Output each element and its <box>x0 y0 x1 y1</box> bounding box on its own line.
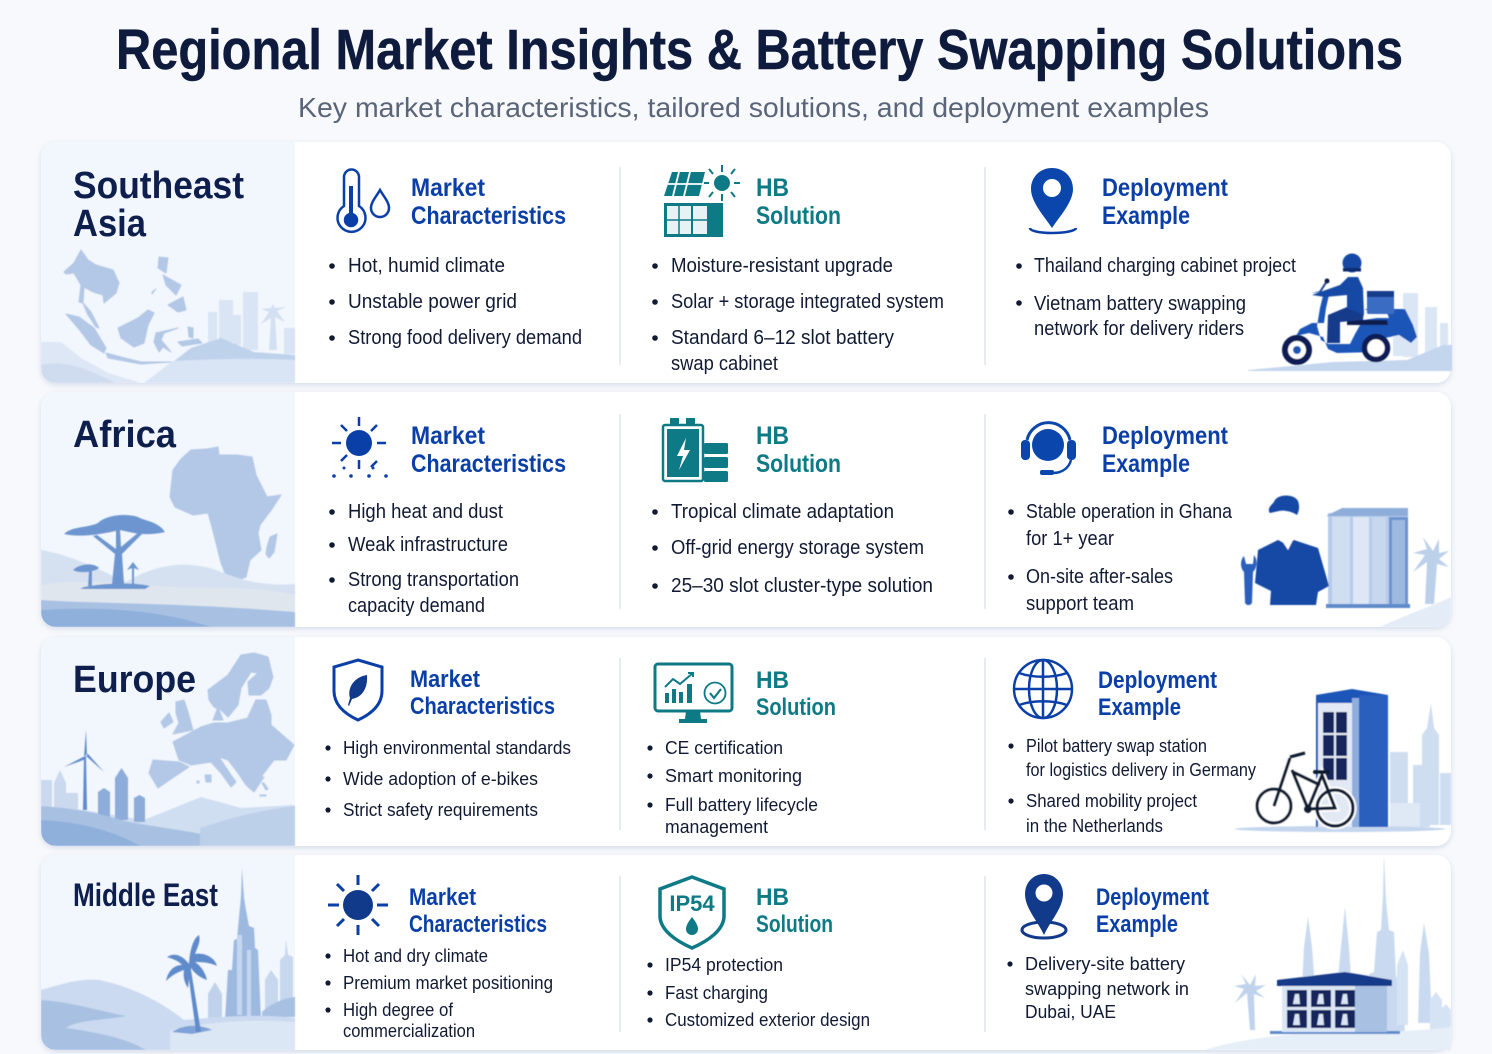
list: HB solution <box>647 955 870 1030</box>
icon: globe <box>1014 660 1072 718</box>
list: deployment example <box>1007 954 1189 1022</box>
list: deployment example: for 1+ year <box>1026 528 1114 550</box>
heading: market characteristics <box>410 666 555 720</box>
list: deployment example: Vietnam battery swapping <box>1034 293 1246 315</box>
illustration: bicycle at swap cabinet with city <box>1235 689 1451 832</box>
heading: deployment example: Example <box>1096 911 1178 938</box>
list: market characteristics: Hot, humid climate <box>348 255 505 277</box>
illustration: swap station with Dubai skyline <box>1205 855 1451 1050</box>
icon: battery with lightning and storage stack <box>663 418 728 482</box>
list: HB solution <box>652 255 944 375</box>
list: market characteristics: Unstable power grid <box>348 291 517 313</box>
heading: market characteristics: Market <box>411 174 486 202</box>
heading: deployment example <box>1098 667 1217 721</box>
list: HB solution: Standard 6–12 slot battery <box>671 327 894 349</box>
list: market characteristics: Weak infrastructure <box>348 534 508 556</box>
icon: sun <box>328 875 388 935</box>
list: HB solution: Tropical climate adaptation <box>671 501 894 523</box>
heading: HB solution: HB <box>756 174 789 202</box>
heading: deployment example <box>1102 422 1229 478</box>
icon: support headset <box>1021 423 1076 475</box>
heading: HB solution: HB <box>756 422 789 450</box>
region illustration: Africa map, acacia tree and hills <box>41 392 295 627</box>
region name: Middle East <box>73 877 218 913</box>
list: deployment example: swapping network in <box>1025 979 1189 999</box>
list: deployment example: for logistics delivery in Germany <box>1026 760 1256 780</box>
list: deployment example <box>1008 501 1233 615</box>
list: HB solution: Moisture-resistant upgrade <box>671 255 893 277</box>
heading: market characteristics: Characteristics <box>409 911 547 938</box>
illustration: technician, cabinet and palm <box>1241 495 1451 627</box>
heading: HB solution: Solution <box>756 202 841 230</box>
list: deployment example: network for delivery riders <box>1034 318 1244 340</box>
list: deployment example: Shared mobility project <box>1026 791 1197 811</box>
panel: Africa <box>41 392 1451 627</box>
list: HB solution: IP54 protection <box>665 955 783 975</box>
region name <box>73 165 244 245</box>
subtitle: Key market characteristics, tailored solutions, and deployment examples <box>298 92 1209 123</box>
list: deployment example <box>1016 255 1296 340</box>
region illustration: Southeast Asia map and skyline <box>41 142 295 383</box>
heading: deployment example: Deployment <box>1102 174 1229 202</box>
heading: deployment example <box>1102 174 1229 230</box>
list: HB solution: Customized exterior design <box>665 1010 870 1030</box>
panel: Southeast Asia <box>41 142 1452 383</box>
heading: HB solution: Solution <box>756 450 841 478</box>
heading: market characteristics: Market <box>411 422 486 450</box>
list: HB solution: swap cabinet <box>671 353 778 375</box>
list: market characteristics: Premium market positioning <box>343 973 553 993</box>
list: market characteristics <box>329 501 519 617</box>
icon: sun with dust <box>332 417 388 478</box>
illustration: delivery rider on scooter <box>1248 254 1452 371</box>
list: HB solution: Solar + storage integrated system <box>671 291 944 313</box>
heading: deployment example <box>1096 884 1209 938</box>
heading: deployment example: Example <box>1102 450 1190 478</box>
region name: Africa <box>73 414 177 456</box>
list: HB solution <box>647 738 818 837</box>
icon: monitor with chart and check <box>655 664 732 723</box>
list: market characteristics <box>325 738 571 820</box>
list: market characteristics: commercialization <box>343 1021 475 1041</box>
list: market characteristics <box>325 946 553 1041</box>
list: HB solution <box>652 501 933 597</box>
heading: HB solution: HB <box>756 884 789 911</box>
heading: deployment example: Deployment <box>1102 422 1229 450</box>
list: market characteristics <box>329 255 582 349</box>
heading: HB solution: Solution <box>756 911 833 938</box>
panel: Middle East <box>41 855 1451 1050</box>
list: deployment example: Thailand charging cabinet project <box>1034 255 1296 277</box>
heading: HB solution <box>756 884 833 938</box>
list: deployment example: Stable operation in Ghana <box>1026 501 1233 523</box>
heading: market characteristics <box>409 884 547 938</box>
icon: location pin <box>1030 168 1076 233</box>
icon: thermometer and droplet <box>338 170 389 232</box>
heading: market characteristics: Characteristics <box>411 202 566 230</box>
icon: solar panel and cabinet <box>664 165 740 237</box>
list: HB solution: CE certification <box>665 738 783 758</box>
region name: Southeast <box>73 165 244 207</box>
heading: market characteristics: Characteristics <box>410 693 555 720</box>
heading: HB solution <box>756 174 841 230</box>
heading: deployment example: Deployment <box>1096 884 1209 911</box>
list: market characteristics: Wide adoption of e-bikes <box>343 769 538 789</box>
icon: dark location pin <box>1022 874 1066 938</box>
list: market characteristics: Strong transportation <box>348 569 519 591</box>
list: market characteristics: capacity demand <box>348 595 485 617</box>
list: market characteristics: Hot and dry climate <box>343 946 488 966</box>
list: market characteristics: High heat and dust <box>348 501 503 523</box>
panel: Europe <box>41 637 1451 846</box>
heading: HB solution <box>756 422 841 478</box>
icon: IP54 shield <box>660 877 724 948</box>
list: deployment example: Pilot battery swap station <box>1026 736 1207 756</box>
list: deployment example: support team <box>1026 593 1134 615</box>
list: deployment example <box>1008 736 1256 836</box>
heading: market characteristics: Characteristics <box>411 450 566 478</box>
icon: shield with leaf <box>334 660 382 720</box>
region illustration: Burj tower, palm and dunes <box>41 855 295 1050</box>
list: deployment example: Delivery-site battery <box>1025 954 1185 974</box>
list: market characteristics: High degree of <box>343 1000 454 1020</box>
heading: deployment example: Deployment <box>1098 667 1217 694</box>
list: HB solution: Off-grid energy storage system <box>671 537 924 559</box>
region name: Europe <box>73 659 196 701</box>
heading: market characteristics <box>411 174 566 230</box>
region illustration: Europe map, wind turbine and town <box>41 637 295 846</box>
heading: market characteristics: Market <box>410 666 480 693</box>
list: deployment example: On-site after-sales <box>1026 566 1173 588</box>
list: HB solution: 25–30 slot cluster-type solution <box>671 575 933 597</box>
heading: market characteristics: Market <box>409 884 476 911</box>
heading: market characteristics <box>411 422 566 478</box>
list: HB solution: Smart monitoring <box>665 766 802 786</box>
heading: deployment example: Example <box>1102 202 1190 230</box>
list: HB solution: management <box>665 817 768 837</box>
list: HB solution: Fast charging <box>665 983 768 1003</box>
heading: HB solution: HB <box>756 667 789 694</box>
list: HB solution: Full battery lifecycle <box>665 795 818 815</box>
list: market characteristics: Strong food delivery demand <box>348 327 582 349</box>
list: deployment example: Dubai, UAE <box>1025 1002 1116 1022</box>
list: deployment example: in the Netherlands <box>1026 816 1163 836</box>
heading: deployment example: Example <box>1098 694 1181 721</box>
icon: IP54 shield: IP54 <box>669 891 715 916</box>
heading: HB solution: Solution <box>756 694 836 721</box>
region name: Asia <box>73 203 147 245</box>
list: market characteristics: High environmental standards <box>343 738 571 758</box>
list: market characteristics: Strict safety requirements <box>343 800 538 820</box>
heading: HB solution <box>756 667 836 721</box>
